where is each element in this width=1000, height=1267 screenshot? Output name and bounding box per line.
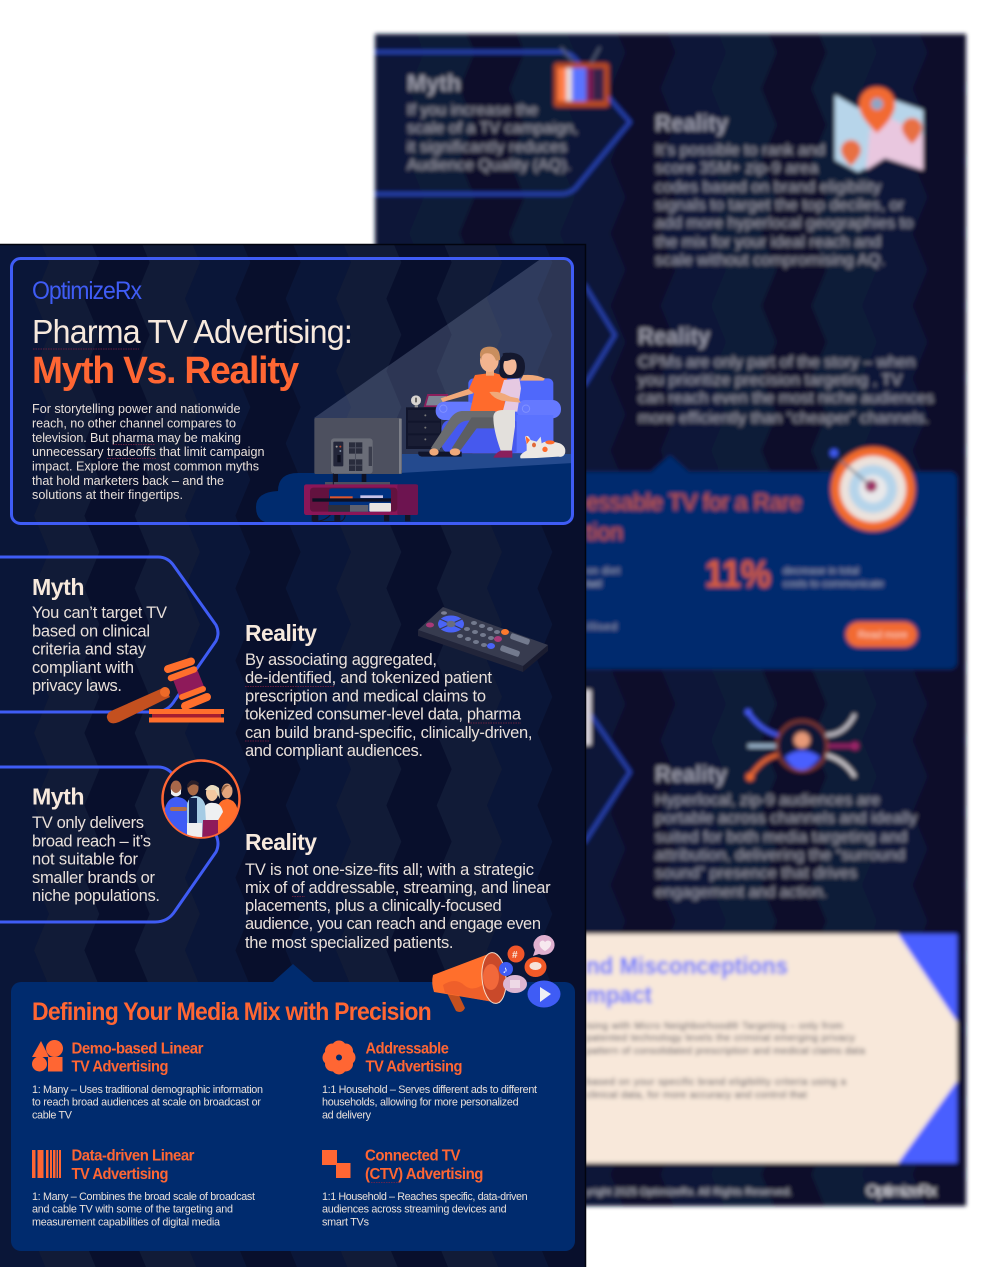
text: addressable: 1:1 Household – Serves different ads to different: [322, 1084, 537, 1096]
text: demo-based: [32, 1084, 263, 1122]
text: connected tv: 1:1 Household – Reaches specific, data-driven: [322, 1191, 528, 1203]
text: reality statement: the mix for your ideal reach and: [655, 234, 881, 251]
intro text: that hold marketers back – and the: [32, 474, 224, 488]
text: reality one: [245, 651, 532, 760]
text: addressable: [322, 1084, 537, 1122]
hero panel: [12, 258, 573, 524]
myth outline: portability: [584, 705, 630, 843]
text: reality three statement: engagement and action.: [655, 884, 827, 901]
text: reality two statement: you prioritize precision targeting , TV: [638, 372, 902, 389]
text: reality statement: scale without compromising AQ.: [655, 252, 885, 269]
icon: shapes: [32, 1040, 63, 1072]
heading: myth: Myth: [407, 70, 461, 96]
text: myth one: You can’t target TV: [32, 604, 167, 622]
icon: tv back: [314, 418, 402, 483]
text: reality three statement: attribution, delivering the “surround: [655, 847, 905, 864]
icon: tv console: [304, 473, 418, 522]
text: reality two statement: more efficiently than “cheaper” channels.: [638, 410, 929, 427]
panel: misconceptions: [500, 934, 957, 1163]
panel: blurred background page: [375, 34, 966, 1206]
icon: barcode: [32, 1150, 61, 1178]
text: reality two: the most specialized patients.: [245, 934, 454, 952]
text: reality one: can build brand-specific, clinically-driven,: [245, 724, 532, 742]
heading: addressable: [366, 1040, 462, 1076]
text: reality two: TV is not one-size-fits all; with a strategic: [245, 861, 534, 879]
title: [32, 313, 352, 392]
text: myth statement: Audience Quality (AQ).: [407, 157, 571, 174]
text: data-driven: and cable TV with some of the targeting and: [32, 1204, 233, 1216]
text: stat caption: decrease in total: [783, 565, 859, 577]
text: myth one: criteria and stay: [32, 640, 147, 658]
heading: connected tv: Connected TV: [365, 1148, 461, 1164]
icon: group of people: [162, 760, 240, 843]
text: myth two: TV only delivers: [32, 814, 144, 832]
text: reality three statement: suited for both media targeting and: [655, 829, 907, 846]
text: addressable: ad delivery: [322, 1110, 372, 1122]
footer: logo: OptimizeRx: [866, 1183, 937, 1200]
text: myth statement: If you increase the: [407, 102, 538, 119]
myth two outline: [0, 767, 218, 922]
heading: demo-based linear: Demo-based Linear: [72, 1040, 203, 1058]
text: stat caption: [586, 565, 884, 633]
figure: man: [418, 347, 545, 457]
myth one outline: [0, 557, 218, 712]
panel: front infographic: [0, 244, 586, 1267]
intro text: television. But pharma may be making: [32, 431, 241, 445]
text: addressable: households, allowing for more personalized: [322, 1096, 519, 1108]
text: reality two: placements, plus a clinically-focused: [245, 897, 502, 915]
icon: gavel: [107, 662, 224, 723]
text: reality statement: score 35M+ zip-9 area: [655, 160, 818, 177]
text: reality one: tokenized consumer-level data, pharma: [245, 706, 522, 724]
text: reality statement: codes based on brand eligibility: [655, 179, 881, 196]
text: reality three statement: portable across channels and ideally: [655, 810, 917, 827]
heading: myth two: Myth: [32, 784, 84, 810]
text: data-driven: measurement capabilities of digital media: [32, 1217, 220, 1229]
text: connected tv: audiences across streaming devices and: [322, 1204, 507, 1216]
heading: data-driven linear: TV Advertising: [72, 1166, 168, 1183]
heading: reality two: Reality: [245, 829, 317, 855]
illustration: living room scene: [256, 258, 573, 523]
text: misconceptions body: [586, 1021, 865, 1101]
heading: addressable: Addressable: [366, 1040, 449, 1058]
myth outline: campaign scale: [375, 52, 630, 194]
heading: case study: tion: [586, 519, 623, 545]
text: myth one: [32, 604, 167, 695]
text: reality one: de-identified, and tokenized patient: [245, 669, 492, 687]
text: reality statement: It’s possible to rank and: [655, 142, 825, 159]
text: reality one: prescription and medical claims to: [245, 688, 486, 706]
text: reality two: mix of of addressable, streaming, and linear: [245, 879, 551, 897]
text: stat caption: on diet: [586, 565, 620, 577]
text: myth statement: scale of a TV campaign,: [407, 120, 578, 137]
text: reality three statement: [655, 792, 917, 901]
panel: case study: [500, 447, 957, 669]
icon: megaphone with social bubbles: [432, 935, 560, 1012]
text: data-driven: 1: Many – Combines the broad scale of broadcast: [32, 1191, 255, 1203]
subtitle: Myth Vs. Reality: [32, 350, 299, 392]
text: connected tv: [322, 1191, 528, 1229]
icon: target: [830, 447, 915, 531]
icon: stepped squares: [322, 1150, 350, 1178]
text: reality two: [245, 861, 551, 952]
text: myth one: privacy laws.: [32, 677, 122, 695]
heading: myth one: Myth: [32, 574, 84, 600]
heading: data-driven linear: Data-driven Linear: [72, 1148, 194, 1164]
text: myth statement: it significantly reduces: [407, 139, 567, 156]
heading: connected tv: (CTV) Advertising: [365, 1166, 483, 1183]
heading: data-driven linear: [72, 1148, 194, 1183]
text: stat caption: illised: [586, 621, 617, 633]
icon: megaphone with social bubbles: ♪: [502, 965, 508, 976]
text: reality statement: signals to target the top deciles, or: [655, 197, 905, 214]
icon: nightstand with clock and frame: [406, 394, 448, 449]
text: misconceptions body: pattern of consolidated prescription and medical claims data: [586, 1046, 865, 1057]
footer: copyright: yright 2025 OptimizeRx. All Rights Reserved.: [586, 1187, 792, 1198]
text: myth two: not suitable for: [32, 850, 138, 868]
text: reality two: audience, you can reach and engage even: [245, 915, 541, 933]
icon: remote control: [418, 607, 548, 672]
button: read more: [846, 622, 917, 647]
text: reality three statement: Hyperlocal, zip-9 audiences are: [655, 792, 880, 809]
heading: demo-based linear: TV Advertising: [72, 1058, 168, 1076]
stat: 11 percent: 11%: [705, 554, 771, 596]
panel: media mix: [11, 964, 575, 1251]
heading: addressable: TV Advertising: [366, 1058, 462, 1076]
intro text: unnecessary tradeoffs that limit campaign: [32, 445, 264, 459]
heading: reality three: Reality: [655, 761, 727, 787]
heading: demo-based linear: [72, 1040, 203, 1076]
heading: misconceptions: nd Misconceptions: [586, 953, 788, 980]
logo: OptimizeRx: [32, 277, 142, 305]
text: myth one: based on clinical: [32, 622, 150, 640]
icon: map with pins: [835, 87, 923, 172]
text: connected tv: smart TVs: [322, 1217, 370, 1229]
text: myth two: smaller brands or: [32, 869, 156, 887]
heading: case study: essable TV for a Rare: [586, 489, 802, 515]
text: reality statement: [655, 142, 913, 269]
heading: reality two: Reality: [638, 323, 710, 349]
heading: reality: Reality: [655, 110, 728, 136]
text: reality two statement: can reach even the most niche audiences: [638, 390, 934, 407]
text: stat caption: costs to communicate: [783, 578, 884, 590]
text: misconceptions body: clinical data, for more accuracy and control that: [586, 1090, 807, 1101]
text: demo-based: to reach broad audiences at scale on broadcast or: [32, 1096, 261, 1108]
icon: sofa: [436, 378, 561, 453]
text: reality two statement: [638, 354, 934, 427]
heading: media mix: Defining Your Media Mix with Precision: [32, 998, 431, 1026]
icon: retro television: [554, 47, 609, 107]
text: reality two statement: CPMs are only part of the story – when: [638, 354, 915, 371]
text: data-driven: [32, 1191, 255, 1229]
intro text: impact. Explore the most common myths: [32, 460, 259, 474]
text: reality one: and compliant audiences.: [245, 742, 423, 760]
text: reality one: By associating aggregated,: [245, 651, 437, 669]
intro text: [32, 402, 264, 502]
text: misconceptions body: based on your specific brand eligibility criteria using a: [586, 1077, 846, 1088]
icon: flower: [322, 1040, 356, 1074]
text: demo-based: 1: Many – Uses traditional demographic information: [32, 1084, 263, 1096]
heading: connected tv: [365, 1148, 483, 1183]
text: stat caption: ieved: [586, 578, 602, 590]
myth outline: CPM: [584, 284, 615, 386]
text: myth statement: [407, 102, 578, 174]
text: demo-based: cable TV: [32, 1110, 73, 1122]
heading: case study: [586, 489, 802, 545]
text: myth one: compliant with: [32, 659, 134, 677]
icon: connected person: [745, 709, 859, 781]
text: reality three statement: sound” presence that drives: [655, 865, 857, 882]
heading: reality one: Reality: [245, 620, 317, 646]
button: read more: Read more: [858, 630, 908, 641]
heading: misconceptions: [586, 953, 788, 1009]
icon: fragment of illustration: [584, 690, 591, 745]
text: myth two: broad reach – it’s: [32, 832, 151, 850]
text: reality statement: add more hyperlocal geographies to: [655, 215, 913, 232]
title: Pharma TV Advertising:: [32, 313, 352, 350]
intro text: reach, no other channel compares to: [32, 416, 236, 430]
text: myth two: niche populations.: [32, 887, 160, 905]
icon: megaphone with social bubbles: #: [512, 950, 518, 961]
intro text: solutions at their fingertips.: [32, 488, 183, 502]
figure: woman: [489, 353, 525, 458]
text: misconceptions body: ising with Micro Neighborhood® Targeting – only from: [586, 1021, 843, 1032]
heading: misconceptions: mpact: [586, 982, 652, 1009]
figure: dog: [520, 436, 565, 458]
intro text: For storytelling power and nationwide: [32, 402, 240, 416]
text: misconceptions body: patented technology levels the criminal emerging privacy: [586, 1033, 855, 1044]
text: myth two: [32, 814, 160, 905]
